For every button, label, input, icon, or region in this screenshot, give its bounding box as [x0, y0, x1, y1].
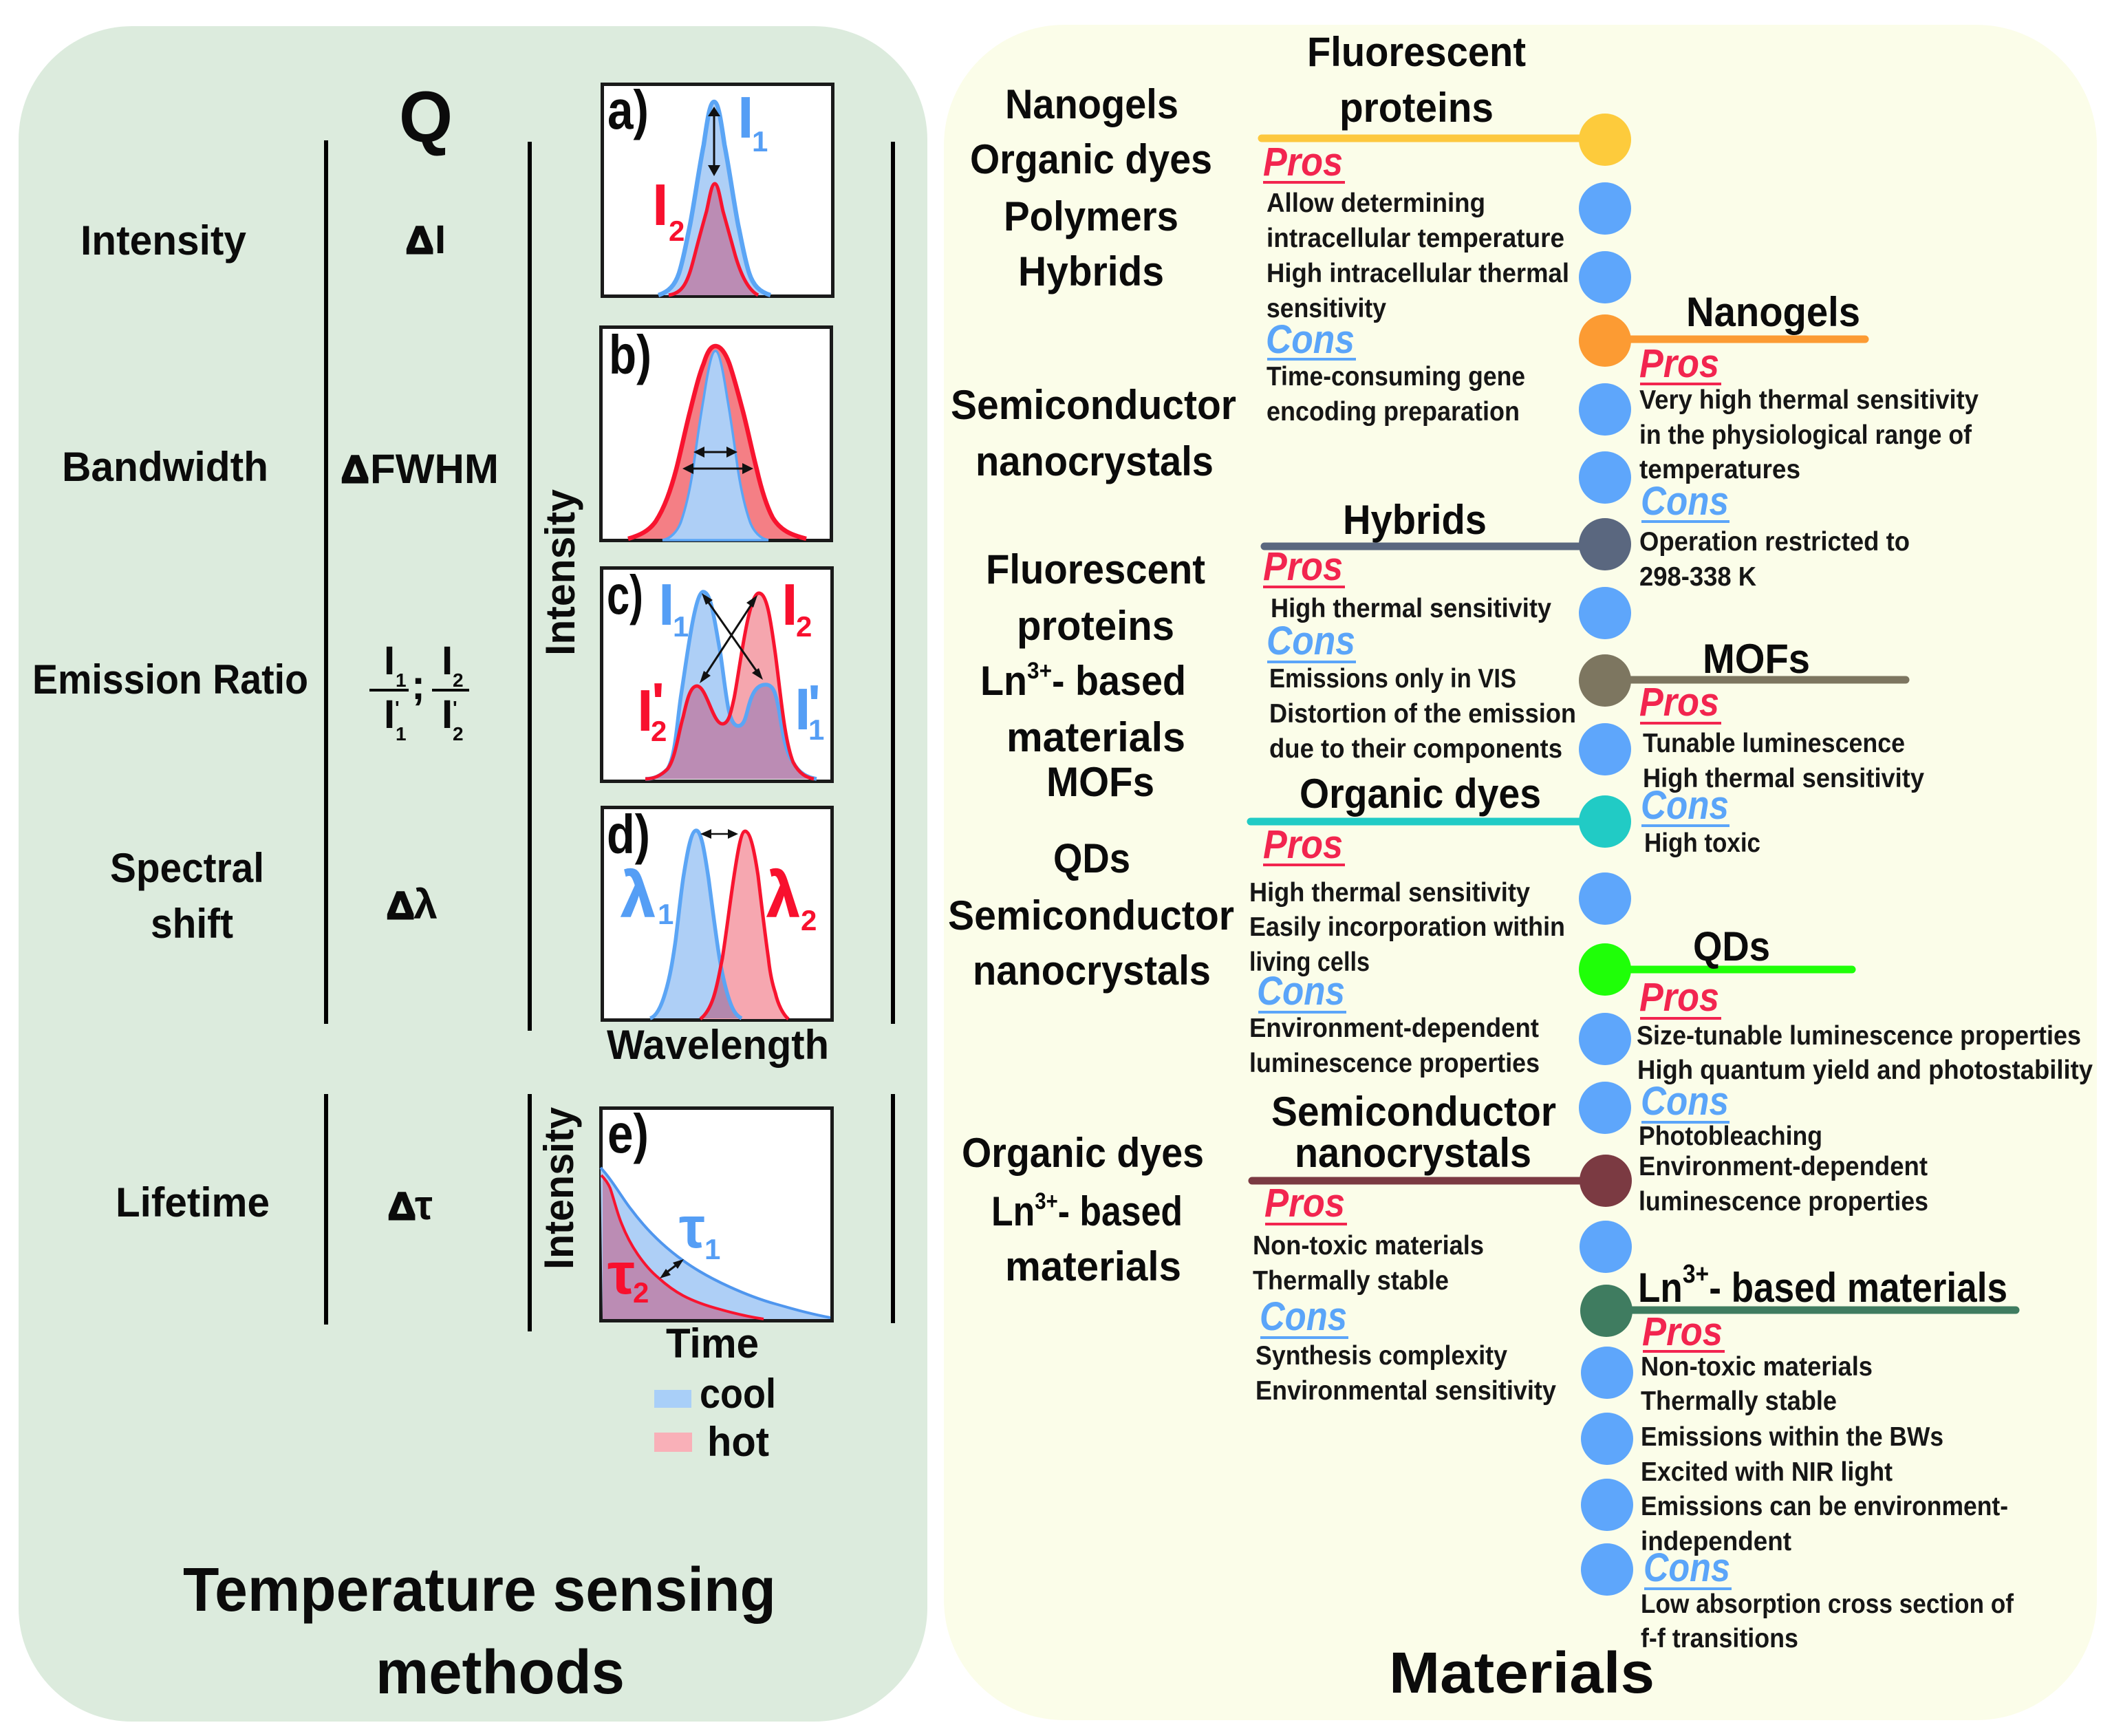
list: temperature ranking of materials: Semiconductor	[951, 382, 1236, 428]
block: hybrids: High thermal sensitivity	[1271, 594, 1551, 623]
list: temperature ranking of materials: materials	[1006, 714, 1185, 760]
block: Ln3+ based materials: - based materials	[1709, 1265, 2007, 1311]
axis label: time: Time	[666, 1320, 759, 1367]
title: materials: Materials	[1389, 1640, 1655, 1705]
timeline nodes	[1579, 114, 1633, 1596]
block: organic dyes: Pros	[1263, 822, 1343, 867]
chart c: emission ratio change: '	[651, 672, 665, 733]
list: temperature ranking of materials: - based	[1052, 658, 1186, 704]
chart e: lifetime decay: τ	[679, 1195, 705, 1261]
block: Ln3+ based materials: Emissions within the BWs	[1641, 1422, 1943, 1452]
chart e: lifetime decay: 2	[633, 1276, 649, 1309]
row: emission ratio	[32, 639, 469, 744]
chart c: emission ratio change: 2	[651, 715, 667, 747]
block: organic dyes	[1249, 771, 1565, 1078]
block: semiconductor nanocrystals: nanocrystals	[1295, 1130, 1531, 1176]
block: nanogels: Operation restricted to	[1639, 527, 1910, 557]
block: semiconductor nanocrystals: Thermally stable	[1253, 1266, 1449, 1296]
block: QDs: Environment-dependent	[1639, 1152, 1928, 1181]
block: Ln3+ based materials: Ln	[1638, 1265, 1688, 1311]
list: temperature ranking of materials	[948, 81, 1236, 1289]
chart c: emission ratio change	[601, 564, 832, 782]
block: MOFs: Tunable luminescence	[1643, 729, 1905, 758]
block: MOFs: MOFs	[1703, 636, 1810, 682]
chart d: spectral shift	[603, 804, 832, 1020]
row: emission ratio: '	[453, 697, 457, 718]
list: temperature ranking of materials: 3+	[1035, 1188, 1058, 1214]
chart d: spectral shift: λ	[767, 860, 799, 930]
block: Ln3+ based materials: Excited with NIR light	[1641, 1457, 1893, 1487]
block: nanogels: Nanogels	[1686, 289, 1860, 335]
chart a: intensity change: I	[652, 173, 669, 238]
block: fluorescent proteins	[1263, 29, 1569, 427]
row: emission ratio: 2	[453, 669, 464, 691]
list: temperature ranking of materials: MOFs	[1046, 759, 1154, 805]
chart c: emission ratio change: I	[795, 677, 811, 742]
title: temperature sensing methods: methods	[376, 1638, 625, 1707]
list: temperature ranking of materials: QDs	[1053, 835, 1130, 881]
chart e: lifetime decay: e)	[607, 1103, 649, 1164]
block: hybrids: Emissions only in VIS	[1269, 664, 1516, 694]
block: organic dyes: Organic dyes	[1300, 771, 1541, 817]
row: bandwidth: FWHM	[370, 446, 499, 492]
panel: temperature sensing methods	[19, 26, 927, 1722]
block: semiconductor nanocrystals: Synthesis complexity	[1256, 1341, 1507, 1371]
block: fluorescent proteins: Time-consuming gene	[1267, 362, 1525, 392]
chart e: lifetime decay	[601, 1103, 832, 1321]
chart b: bandwidth change	[601, 324, 831, 541]
row: bandwidth	[62, 444, 499, 492]
chart a: intensity change: a)	[607, 79, 649, 140]
list: temperature ranking of materials: materials	[1005, 1243, 1181, 1289]
chart d: spectral shift: d)	[607, 804, 650, 865]
row: lifetime: Lifetime	[116, 1179, 270, 1225]
chart d: spectral shift: λ	[621, 860, 655, 930]
chart e: lifetime decay: τ	[607, 1241, 635, 1307]
chart c: emission ratio change: I	[637, 678, 654, 744]
chart d: spectral shift: 2	[801, 904, 817, 936]
title: temperature sensing methods: Temperature sensing	[183, 1556, 776, 1625]
chart c: emission ratio change: I	[658, 572, 675, 638]
chart c: emission ratio change: 2	[796, 610, 812, 643]
row: bandwidth: Bandwidth	[62, 444, 268, 490]
block: MOFs	[1639, 636, 1924, 858]
row: lifetime: Δ	[388, 1184, 416, 1228]
row: emission ratio: 2	[453, 723, 464, 744]
row: spectral shift: shift	[151, 901, 233, 947]
block: hybrids: due to their components	[1269, 734, 1562, 764]
block: Ln3+ based materials: Thermally stable	[1641, 1386, 1837, 1416]
row: spectral shift	[110, 845, 438, 947]
block: organic dyes: living cells	[1249, 947, 1370, 977]
chart a: intensity change: I	[737, 85, 754, 151]
row: intensity: I	[435, 217, 446, 262]
block: organic dyes: High thermal sensitivity	[1249, 878, 1530, 908]
chart c: emission ratio change: c)	[607, 564, 643, 625]
row: emission ratio: Emission Ratio	[32, 656, 308, 703]
axis label: intensity upper: Intensity	[537, 489, 583, 656]
row: spectral shift: λ	[413, 881, 438, 928]
block: QDs: Photobleaching	[1639, 1122, 1822, 1151]
chart a: intensity change	[603, 79, 832, 296]
chart a: intensity change: 2	[669, 215, 685, 247]
block: organic dyes: luminescence properties	[1249, 1049, 1540, 1078]
block: QDs	[1637, 923, 2093, 1217]
block: QDs: Size-tunable luminescence properties	[1637, 1021, 2081, 1051]
row: intensity: Δ	[406, 218, 433, 261]
list: temperature ranking of materials: Organic dyes	[970, 136, 1212, 182]
row: intensity: Intensity	[80, 217, 247, 264]
list: temperature ranking of materials: Ln	[991, 1188, 1042, 1234]
list: temperature ranking of materials: Organic dyes	[962, 1130, 1204, 1176]
row: emission ratio: I	[384, 639, 395, 683]
block: organic dyes: Environment-dependent	[1249, 1014, 1539, 1043]
block: hybrids: Hybrids	[1343, 497, 1487, 543]
list: temperature ranking of materials: Ln	[980, 658, 1031, 704]
row: lifetime	[116, 1179, 433, 1228]
block: semiconductor nanocrystals: Pros	[1264, 1181, 1345, 1225]
chart a: intensity change: 1	[752, 125, 768, 158]
block: QDs: Pros	[1639, 975, 1719, 1020]
block: nanogels: Very high thermal sensitivity	[1639, 385, 1979, 415]
block: fluorescent proteins: sensitivity	[1267, 294, 1386, 323]
block: nanogels: temperatures	[1639, 455, 1800, 484]
block: Ln3+ based materials: Cons	[1644, 1545, 1730, 1590]
row: emission ratio: I	[442, 692, 453, 737]
block: nanogels	[1639, 289, 1979, 592]
row: emission ratio: I	[384, 692, 395, 737]
block: hybrids	[1263, 497, 1576, 764]
block: MOFs: Pros	[1639, 680, 1719, 725]
block: Ln3+ based materials: 3+	[1683, 1260, 1709, 1289]
block: Ln3+ based materials: Pros	[1642, 1309, 1723, 1354]
heading: Q column: Q	[399, 77, 453, 158]
list: temperature ranking of materials: 3+	[1027, 658, 1052, 684]
block: semiconductor nanocrystals	[1253, 1089, 1556, 1406]
row: intensity	[80, 217, 446, 264]
row: spectral shift: Δ	[387, 883, 414, 927]
block: semiconductor nanocrystals: Semiconductor	[1271, 1089, 1556, 1135]
block: MOFs: High thermal sensitivity	[1643, 764, 1924, 793]
block: fluorescent proteins: Fluorescent	[1307, 29, 1526, 75]
block: MOFs: Cons	[1641, 783, 1729, 828]
list: temperature ranking of materials: Hybrids	[1018, 248, 1164, 294]
chart b: bandwidth change: b)	[609, 324, 651, 385]
block: Ln3+ based materials: f-f transitions	[1641, 1624, 1798, 1653]
list: temperature ranking of materials: proteins	[1017, 603, 1174, 649]
legend: cool and hot: cool	[700, 1371, 776, 1417]
chart d: spectral shift: 1	[658, 898, 674, 930]
divider lines	[326, 140, 893, 1331]
chart c: emission ratio change: I	[782, 572, 798, 638]
block: fluorescent proteins: intracellular temperature	[1267, 224, 1564, 253]
block: semiconductor nanocrystals: Environmental sensitivity	[1256, 1376, 1556, 1406]
axis label: wavelength: Wavelength	[607, 1022, 829, 1068]
list: temperature ranking of materials: nanocrystals	[973, 947, 1211, 994]
list: temperature ranking of materials: - based	[1058, 1188, 1183, 1234]
row: emission ratio: 1	[396, 723, 407, 744]
block: Ln3+ based materials	[1638, 1260, 2014, 1653]
block: semiconductor nanocrystals: Cons	[1260, 1294, 1347, 1339]
chart c: emission ratio change: 1	[673, 610, 689, 643]
block: Ln3+ based materials: Emissions can be environment-	[1641, 1492, 2008, 1521]
chart e: lifetime decay: 1	[704, 1233, 720, 1265]
block: Ln3+ based materials: independent	[1641, 1527, 1791, 1556]
block: fluorescent proteins: Allow determining	[1267, 189, 1485, 218]
axis label: intensity lower: Intensity	[536, 1106, 582, 1269]
block: hybrids: Distortion of the emission	[1269, 699, 1576, 729]
block: QDs: High quantum yield and photostability	[1637, 1055, 2093, 1085]
block: fluorescent proteins: Pros	[1263, 140, 1343, 184]
list: temperature ranking of materials: Polymers	[1004, 193, 1178, 239]
block: Ln3+ based materials: Non-toxic materials	[1641, 1352, 1873, 1382]
row: emission ratio: I	[442, 639, 453, 683]
legend: cool and hot	[654, 1371, 776, 1465]
timeline connector bars	[1251, 138, 2016, 1310]
title: temperature sensing methods	[183, 1556, 776, 1707]
block: nanogels: in the physiological range of	[1639, 420, 1972, 450]
chart c: emission ratio change: 1	[808, 714, 824, 746]
block: nanogels: 298-338 K	[1639, 562, 1756, 592]
block: organic dyes: Easily incorporation within	[1249, 912, 1565, 942]
block: nanogels: Cons	[1641, 479, 1729, 524]
block: nanogels: Pros	[1639, 341, 1719, 386]
list: temperature ranking of materials: Nanogels	[1005, 81, 1178, 127]
block: QDs: luminescence properties	[1639, 1187, 1928, 1217]
legend: cool and hot: hot	[707, 1419, 769, 1465]
block: fluorescent proteins: Cons	[1266, 317, 1355, 362]
chart c: emission ratio change: '	[808, 674, 821, 735]
block: MOFs: High toxic	[1644, 828, 1760, 858]
block: fluorescent proteins: proteins	[1339, 85, 1494, 131]
block: hybrids: Cons	[1267, 619, 1355, 663]
row: bandwidth: Δ	[341, 447, 369, 491]
row: emission ratio: 1	[396, 669, 407, 691]
block: fluorescent proteins: High intracellular thermal	[1267, 259, 1569, 288]
list: temperature ranking of materials: nanocrystals	[976, 438, 1214, 484]
block: semiconductor nanocrystals: Non-toxic materials	[1253, 1231, 1484, 1261]
row: lifetime: τ	[415, 1182, 433, 1228]
block: hybrids: Pros	[1263, 544, 1343, 589]
panel: materials	[944, 25, 2097, 1720]
block: QDs: QDs	[1693, 923, 1770, 969]
row: emission ratio: ;	[411, 662, 425, 708]
block: fluorescent proteins: encoding preparation	[1267, 397, 1520, 427]
list: temperature ranking of materials: Semiconductor	[948, 892, 1234, 939]
row: spectral shift: Spectral	[110, 845, 264, 891]
row: emission ratio: '	[395, 697, 400, 718]
block: Ln3+ based materials: Low absorption cross section of	[1641, 1589, 2014, 1619]
block: organic dyes: Cons	[1257, 969, 1345, 1014]
block: QDs: Cons	[1641, 1079, 1729, 1124]
list: temperature ranking of materials: Fluorescent	[986, 546, 1205, 592]
